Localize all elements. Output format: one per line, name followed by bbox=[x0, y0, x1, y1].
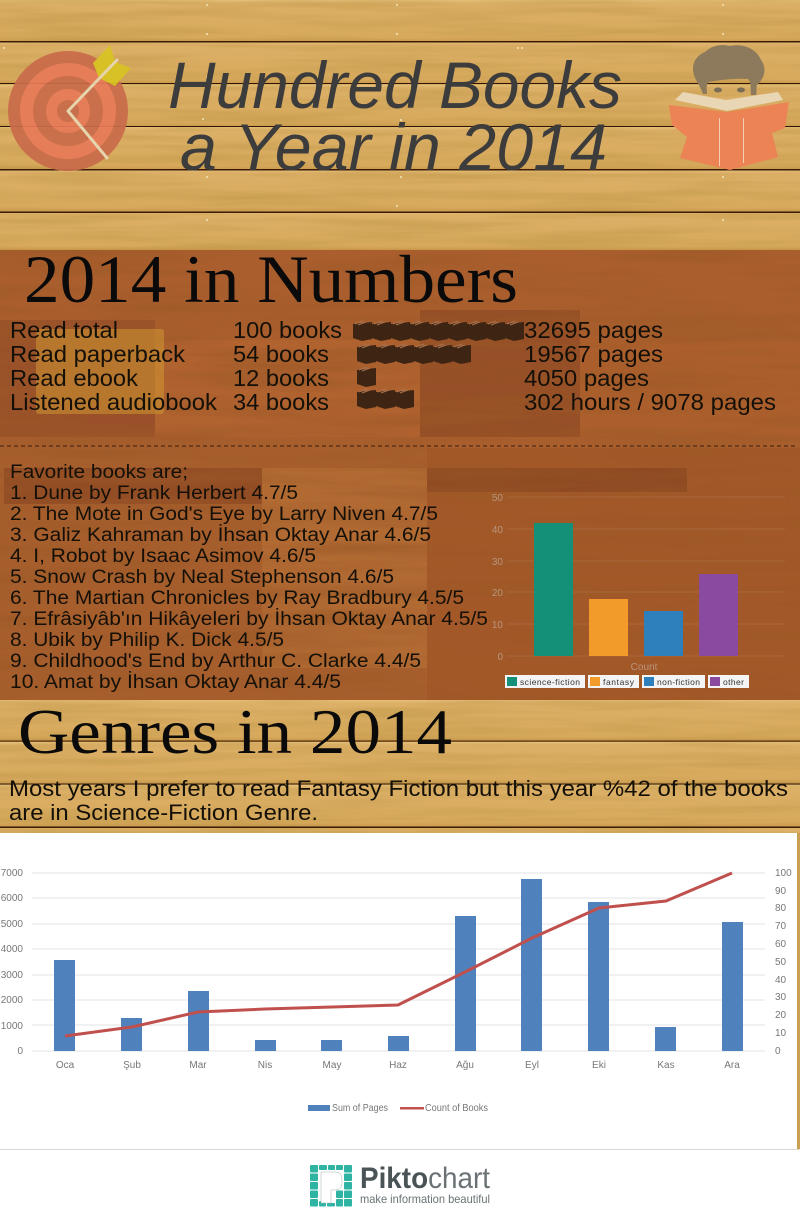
chart legend: Sum of Pages bbox=[332, 1103, 388, 1114]
icon row: 34 books bbox=[357, 389, 414, 409]
panel: monthly chart bbox=[0, 833, 797, 1149]
right axis labels: 50 bbox=[775, 957, 787, 968]
background: brown wood panel bbox=[0, 250, 800, 700]
month labels: Ara bbox=[724, 1060, 740, 1071]
icon: target with arrow bbox=[8, 45, 131, 171]
bar chart: genres count: non-fiction bbox=[657, 677, 700, 687]
icon row: 12 books bbox=[357, 367, 376, 387]
bar chart: genres count bbox=[492, 493, 785, 688]
stats: read paperback: 54 books bbox=[233, 341, 329, 367]
left axis labels: 2000 bbox=[1, 995, 23, 1006]
left axis labels: 5000 bbox=[1, 919, 23, 930]
stats: read paperback: Read paperback bbox=[10, 341, 185, 367]
right axis labels: 80 bbox=[775, 903, 787, 914]
favorite books list: 6. The Martian Chronicles by Ray Bradbury 4.5/5 bbox=[10, 588, 464, 609]
stats: read ebook: Read ebook bbox=[10, 365, 138, 391]
favorite books list: 10. Amat by İhsan Oktay Anar 4.4/5 bbox=[10, 672, 341, 693]
month labels: Oca bbox=[56, 1060, 75, 1071]
favorite books list: 4. I, Robot by Isaac Asimov 4.6/5 bbox=[10, 546, 316, 567]
month labels: Eki bbox=[592, 1060, 606, 1071]
favorite books list: 3. Galiz Kahraman by İhsan Oktay Anar 4.6/5 bbox=[10, 525, 431, 546]
right axis labels: 90 bbox=[775, 886, 787, 897]
genres description: Most years I prefer to read Fantasy Fiction but this year %42 of the books bbox=[9, 776, 788, 801]
stats: read total bbox=[10, 317, 663, 343]
month labels: Nis bbox=[258, 1060, 272, 1071]
left axis labels: 1000 bbox=[1, 1021, 23, 1032]
month labels bbox=[56, 1060, 740, 1071]
month labels: Haz bbox=[389, 1060, 407, 1071]
favorite books list: Favorite books are; bbox=[10, 462, 188, 483]
bar chart: genres count: 40 bbox=[492, 525, 503, 536]
right axis labels: 70 bbox=[775, 921, 787, 932]
title: Hundred Books bbox=[168, 48, 622, 122]
right axis labels: 20 bbox=[775, 1010, 787, 1021]
bars: sum of pages bbox=[54, 879, 743, 1051]
month labels: Eyl bbox=[525, 1060, 539, 1071]
month labels: Mar bbox=[189, 1060, 207, 1071]
right axis labels: 60 bbox=[775, 939, 787, 950]
bar chart: genres count: 10 bbox=[492, 620, 503, 631]
stats: read paperback bbox=[10, 341, 663, 367]
left axis labels: 7000 bbox=[1, 868, 23, 879]
footer logo: Piktochart: make information beautiful bbox=[360, 1192, 490, 1206]
left axis labels: 6000 bbox=[1, 893, 23, 904]
right axis labels: 0 bbox=[775, 1046, 781, 1057]
stats: listened audiobook bbox=[10, 389, 776, 415]
right axis labels: 100 bbox=[775, 868, 792, 879]
stats: read total: 32695 pages bbox=[524, 317, 663, 343]
stats: read total: 100 books bbox=[233, 317, 342, 343]
chart legend bbox=[308, 1103, 488, 1114]
bar chart: genres count: 20 bbox=[492, 588, 503, 599]
decorative yellow box behind stats bbox=[36, 329, 164, 414]
right axis labels bbox=[775, 868, 792, 1057]
icon row: 100 books bbox=[353, 321, 524, 341]
month labels: Şub bbox=[123, 1060, 141, 1071]
stats: listened audiobook: 34 books bbox=[233, 389, 329, 415]
favorite books list: 5. Snow Crash by Neal Stephenson 4.6/5 bbox=[10, 567, 394, 588]
footer logo: Piktochart bbox=[310, 1162, 491, 1206]
stats: read ebook: 12 books bbox=[233, 365, 329, 391]
title bbox=[168, 48, 622, 184]
stats: read paperback: 19567 pages bbox=[524, 341, 663, 367]
bar chart: genres count: Count bbox=[631, 662, 658, 673]
icon: person reading a book bbox=[669, 45, 789, 170]
heading: Genres in 2014: Genres in 2014 bbox=[18, 696, 452, 767]
icon: Piktochart mark bbox=[310, 1165, 352, 1206]
bar chart: genres count: science-fiction bbox=[520, 677, 580, 687]
favorite books list: 7. Efrâsiyâb'ın Hikâyeleri by İhsan Oktay Anar 4.5/5 bbox=[10, 609, 488, 630]
month labels: Ağu bbox=[456, 1060, 474, 1071]
stats: read total: Read total bbox=[10, 317, 118, 343]
icon row: 54 books bbox=[357, 344, 471, 364]
month labels: May bbox=[323, 1060, 341, 1071]
favorite books list: 2. The Mote in God's Eye by Larry Niven 4.7/5 bbox=[10, 504, 438, 525]
stats: read ebook: 4050 pages bbox=[524, 365, 649, 391]
right axis labels: 30 bbox=[775, 992, 787, 1003]
left axis labels bbox=[1, 868, 23, 1057]
chart legend: Count of Books bbox=[425, 1103, 488, 1114]
genres description: are in Science-Fiction Genre. bbox=[9, 800, 318, 825]
bar chart: genres count: fantasy bbox=[603, 677, 635, 687]
heading: 2014 in Numbers: 2014 in Numbers bbox=[24, 241, 518, 317]
favorite books list: 9. Childhood's End by Arthur C. Clarke 4.4/5 bbox=[10, 651, 421, 672]
favorite books list: 8. Ubik by Philip K. Dick 4.5/5 bbox=[10, 630, 284, 651]
footer logo: Piktochart: Piktochart bbox=[360, 1162, 491, 1195]
stats: listened audiobook: Listened audiobook bbox=[10, 389, 217, 415]
bar chart: genres count: 50 bbox=[492, 493, 503, 504]
bar chart: genres count: 0 bbox=[497, 652, 503, 663]
left axis labels: 0 bbox=[17, 1046, 23, 1057]
left axis labels: 3000 bbox=[1, 970, 23, 981]
right axis labels: 10 bbox=[775, 1028, 787, 1039]
title: a Year in 2014 bbox=[180, 110, 607, 184]
background: lower light wood planks bbox=[0, 700, 800, 833]
right axis labels: 40 bbox=[775, 975, 787, 986]
favorite books list bbox=[10, 462, 488, 693]
bar chart: genres count: 30 bbox=[492, 557, 503, 568]
left axis labels: 4000 bbox=[1, 944, 23, 955]
bar chart: genres count: other bbox=[723, 677, 744, 687]
stats: listened audiobook: 302 hours / 9078 pages bbox=[524, 389, 776, 415]
background: upper light wood planks bbox=[0, 0, 800, 250]
stats: read ebook bbox=[10, 365, 649, 391]
genres description bbox=[9, 776, 788, 825]
favorite books list: 1. Dune by Frank Herbert 4.7/5 bbox=[10, 483, 298, 504]
line: count of books bbox=[65, 873, 732, 1036]
month labels: Kas bbox=[657, 1060, 675, 1071]
